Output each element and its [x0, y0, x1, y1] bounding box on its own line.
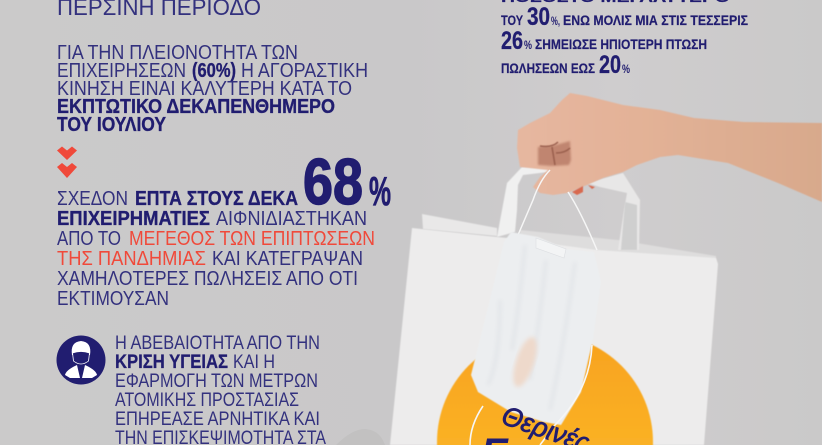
text block: sales decline percentages: ΣΗΜΕΙΩΣΕ ΗΠΙΟΤΕΡΗ ΠΤΩΣΗ	[535, 36, 707, 52]
bag back flap left	[422, 214, 497, 236]
icon: double red chevrons	[57, 146, 77, 178]
bag back panel	[520, 230, 716, 262]
mask ear loops	[518, 170, 597, 250]
fingertip nails	[572, 185, 595, 195]
text block: sales decline percentages: 30	[527, 3, 550, 31]
text block: sales decline percentages: %	[524, 38, 532, 52]
text block: health crisis: ΕΠΗΡΕΑΣΕ ΑΡΝΗΤΙΚΑ ΚΑΙ	[115, 408, 320, 430]
text block: sales decline percentages: ΤΟΥ	[501, 12, 524, 28]
text block: seven out of ten: ΑΠΟ ΤΟ	[57, 227, 121, 250]
text block: seven out of ten: ΧΑΜΗΛΟΤΕΡΕΣ ΠΩΛΗΣΕΙΣ ΑΠΟ ΟΤΙ	[57, 267, 358, 290]
text block: majority of businesses: ΕΠΙΧΕΙΡΗΣΕΩΝ	[57, 59, 186, 82]
text block: seven out of ten: ΕΠΙΧΕΙΡΗΜΑΤΙΕΣ	[57, 207, 210, 230]
text block: seven out of ten: ΑΙΦΝΙΔΙΑΣΤΗΚΑΝ	[216, 207, 367, 230]
surgical mask	[471, 232, 601, 425]
mask pleat band	[536, 238, 566, 258]
stat: 68%: %	[369, 168, 391, 214]
bag handle: left strap	[497, 165, 563, 237]
text block: seven out of ten: ΕΠΤΑ ΣΤΟΥΣ ΔΕΚΑ	[135, 187, 298, 210]
text block: health crisis: ΕΦΑΡΜΟΓΗ ΤΩΝ ΜΕΤΡΩΝ	[115, 370, 318, 392]
text block: seven out of ten: ΣΧΕΔΟΝ	[57, 187, 128, 210]
text block: seven out of ten: ΜΕΓΕΘΟΣ ΤΩΝ ΕΠΙΠΤΩΣΕΩΝ	[129, 227, 375, 250]
bag handle: right strap	[587, 173, 640, 250]
text block: majority of businesses: ΓΙΑ ΤΗΝ ΠΛΕΙΟΝΟΤΗΤΑ ΤΩΝ	[57, 41, 298, 64]
text block: sales decline percentages: %,	[551, 14, 560, 28]
text block: seven out of ten: ΕΚΤΙΜΟΥΣΑΝ	[57, 287, 169, 310]
folded fingers shadow	[538, 141, 571, 166]
finger separators	[540, 142, 570, 165]
text block: sales decline percentages: %	[622, 62, 630, 76]
photo: hand holding paper bag	[390, 93, 822, 445]
shopping bag	[390, 228, 718, 445]
text block: health crisis	[115, 332, 326, 445]
text block: majority of businesses: ΚΙΝΗΣΗ ΕΙΝΑΙ ΚΑΛΥΤΕΡΗ ΚΑΤΑ ΤΟ	[57, 77, 352, 100]
text block: sales decline percentages: 20	[599, 51, 621, 79]
text block: health crisis: ΑΤΟΜΙΚΗΣ ΠΡΟΣΤΑΣΙΑΣ	[115, 389, 299, 411]
mask creases	[488, 245, 575, 410]
text block: seven out of ten: ΤΗΣ ΠΑΝΔΗΜΙΑΣ	[57, 247, 206, 270]
right strap shaded inside	[621, 202, 637, 250]
text block: sales decline percentages	[501, 0, 748, 79]
text block: majority of businesses: Η ΑΓΟΡΑΣΤΙΚΗ	[241, 59, 368, 82]
text block: seven out of ten: ΚΑΙ ΚΑΤΕΓΡΑΨΑΝ	[212, 247, 363, 270]
text block: majority of businesses: (60%)	[192, 59, 236, 82]
mask skin tint	[508, 334, 542, 390]
text block: majority of businesses: ΕΚΠΤΩΤΙΚΟ ΔΕΚΑΠΕΝΘΗΜΕΡΟ	[57, 95, 335, 118]
text block: sales decline percentages: ΠΩΛΗΣΕΩΝ ΕΩΣ	[501, 60, 595, 76]
stat: 68%: 68	[303, 145, 363, 218]
hand and forearm	[517, 93, 822, 202]
text block: health crisis: ΚΡΙΣΗ ΥΓΕΙΑΣ	[115, 351, 228, 373]
mask lower ear loop	[470, 345, 592, 445]
text block: health crisis: ΚΑΙ Η	[233, 351, 275, 373]
text block: health crisis: Η ΑΒΕΒΑΙΟΤΗΤΑ ΑΠΟ ΤΗΝ	[115, 332, 320, 354]
background shadow blob	[336, 429, 385, 445]
text block: sales decline percentages: 26	[501, 27, 523, 55]
text block: sales decline percentages: ΕΝΩ ΜΟΛΙΣ ΜΙΑ ΣΤΙΣ ΤΕΣΣΕΡΙΣ	[563, 12, 748, 28]
text block: seven out of ten	[57, 145, 391, 310]
text block: majority of businesses: ΤΟΥ ΙΟΥΛΙΟΥ	[57, 113, 166, 136]
orange sun circle	[437, 334, 653, 445]
text block: majority of businesses	[57, 41, 368, 136]
icon: person wearing mask	[56, 336, 106, 384]
